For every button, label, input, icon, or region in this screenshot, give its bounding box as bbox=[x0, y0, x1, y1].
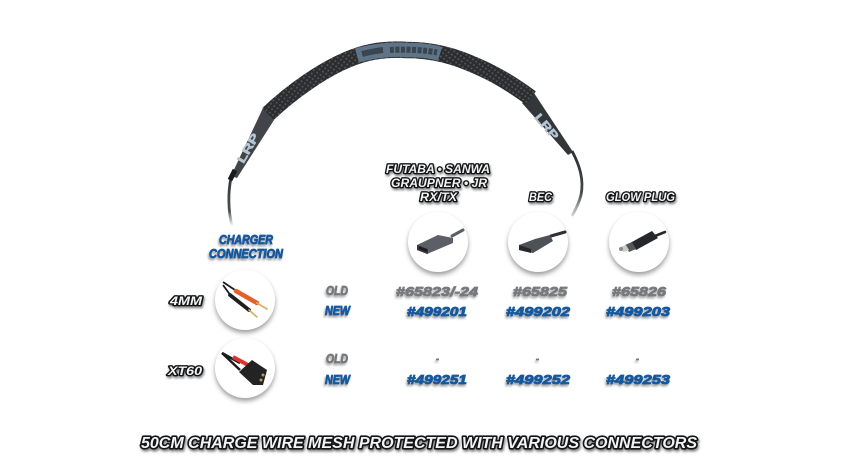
old part placeholder: BEC XT60: - bbox=[536, 354, 539, 364]
icon: RX/TX connector bbox=[408, 212, 468, 272]
icon: XT60 connector bbox=[215, 338, 275, 398]
old part placeholder: RX XT60: - bbox=[436, 354, 439, 364]
title: bottom caption: 50CM CHARGE WIRE MESH PROTECTED WITH VARIOUS CONNECTORS bbox=[141, 435, 698, 452]
part number: 499251: #499251 bbox=[407, 373, 467, 387]
heading: Charger Connection: CONNECTION bbox=[209, 247, 284, 261]
logo: LRP left: LRP bbox=[236, 131, 262, 166]
part number: 65826: #65826 bbox=[612, 285, 667, 299]
old part placeholder: Glow XT60: - bbox=[636, 354, 639, 364]
part number: 65825: #65825 bbox=[513, 285, 568, 299]
part number: 499202: #499202 bbox=[506, 305, 570, 319]
part number: 65823/-24: #65823/-24 bbox=[396, 285, 478, 299]
heading: Charger Connection bbox=[209, 233, 284, 261]
heading: BEC: BEC bbox=[529, 190, 552, 204]
heading: Futaba Sanwa Graupner JR RX/TX bbox=[386, 162, 490, 204]
row label: NEW 4mm: NEW bbox=[325, 304, 351, 318]
part number: 499253: #499253 bbox=[606, 373, 670, 387]
part number: 499203: #499203 bbox=[606, 305, 670, 319]
logo: LRP right: LRP bbox=[532, 112, 560, 143]
heading: Futaba Sanwa Graupner JR RX/TX: FUTABA • SANWA bbox=[386, 162, 490, 176]
heading: Futaba Sanwa Graupner JR RX/TX: RX/TX bbox=[420, 190, 458, 204]
icon: BEC connector bbox=[508, 212, 568, 272]
heading: Charger Connection: CHARGER bbox=[219, 233, 273, 247]
row label: NEW XT60: NEW bbox=[325, 373, 351, 387]
part number: 499201: #499201 bbox=[407, 305, 467, 319]
row label: OLD 4mm: OLD bbox=[326, 284, 348, 298]
label: XT60: XT60 bbox=[167, 364, 202, 378]
icon: Glow plug connector bbox=[609, 212, 669, 272]
label: 4MM: 4MM bbox=[169, 294, 203, 308]
row label: OLD XT60: OLD bbox=[326, 352, 348, 366]
cable: mesh protected charge wire bbox=[229, 50, 582, 226]
icon: 4mm banana plugs bbox=[215, 270, 275, 330]
part number: 499252: #499252 bbox=[506, 373, 570, 387]
heading: Glow Plug: GLOW PLUG bbox=[606, 190, 675, 204]
logo band on mesh bbox=[357, 50, 440, 56]
heading: Futaba Sanwa Graupner JR RX/TX: GRAUPNER • JR bbox=[391, 176, 487, 190]
